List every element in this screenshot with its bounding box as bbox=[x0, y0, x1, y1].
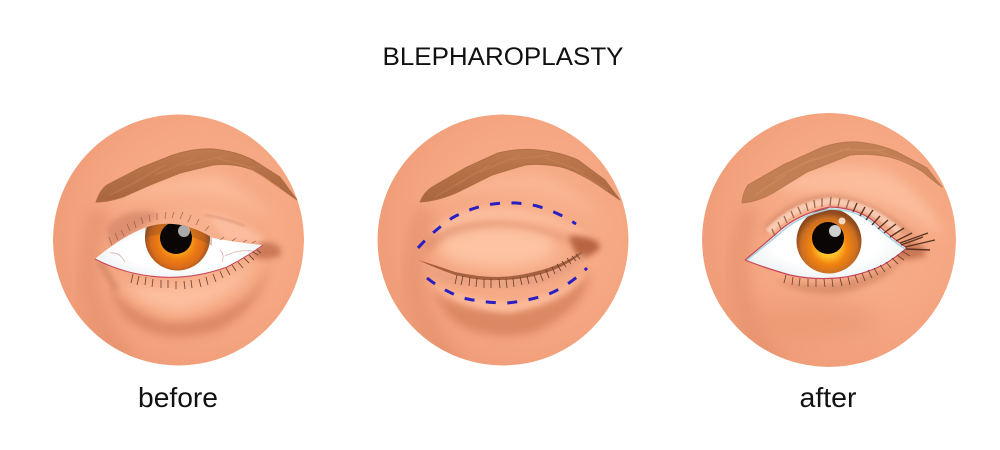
lower incision line bbox=[427, 268, 587, 303]
skin shading bbox=[413, 175, 610, 365]
closed lashes bbox=[455, 254, 580, 288]
label: before: before bbox=[138, 382, 218, 413]
panel: after eye bbox=[702, 113, 956, 370]
label: after: after bbox=[800, 382, 856, 413]
eyelid edge bbox=[745, 207, 907, 279]
eyebrow bbox=[742, 142, 942, 203]
upper incision line bbox=[418, 203, 576, 248]
eye white bbox=[745, 207, 907, 279]
upper lashes bbox=[772, 197, 935, 250]
eye white bbox=[95, 224, 263, 277]
panel: marked eye bbox=[378, 114, 628, 366]
iris and pupil bbox=[796, 208, 862, 274]
lower lashes bbox=[784, 251, 910, 287]
eye rim bbox=[747, 209, 905, 260]
eyebrow bbox=[420, 149, 620, 202]
eyelid edge bbox=[95, 245, 263, 277]
skin shading bbox=[88, 175, 285, 365]
closed eyelid line bbox=[418, 251, 582, 280]
lashes bbox=[109, 212, 256, 245]
veins bbox=[110, 250, 258, 262]
eyelid crease highlight bbox=[768, 201, 900, 232]
eyebrow bbox=[96, 149, 297, 202]
skin disc bbox=[702, 113, 956, 367]
iris and pupil bbox=[145, 224, 212, 270]
skin shading bbox=[738, 167, 945, 370]
skin disc bbox=[378, 114, 628, 366]
panel: before eye bbox=[53, 114, 304, 366]
skin disc bbox=[53, 114, 304, 366]
title: BLEPHAROPLASTY bbox=[382, 43, 624, 71]
